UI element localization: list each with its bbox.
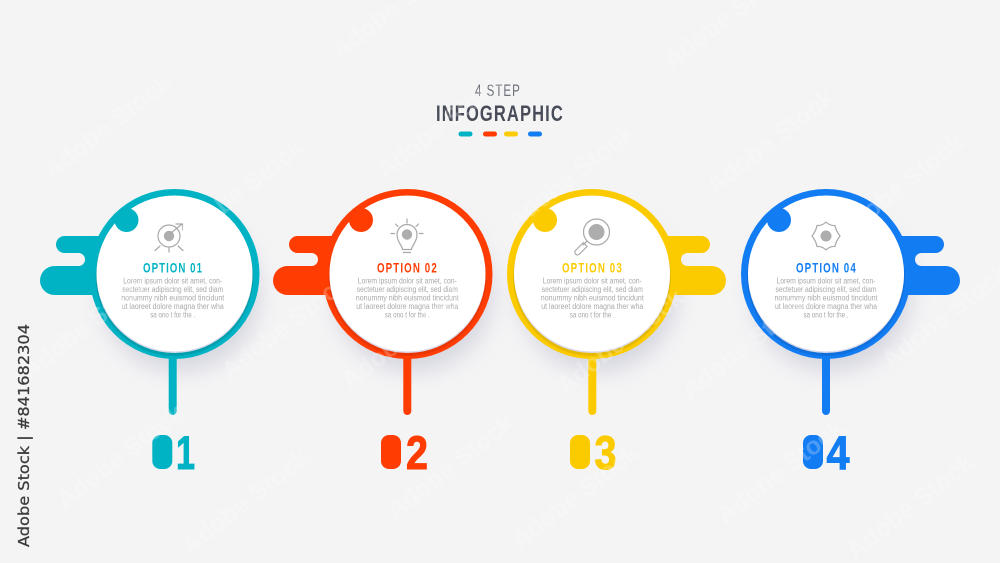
ring: [90, 189, 260, 359]
body text: sa ono t for the .: [804, 310, 848, 320]
icon: magnifying glass: [575, 219, 610, 255]
number 03: 3: [594, 426, 616, 479]
watermark pattern: Adobe Stock: [506, 439, 644, 555]
body text: sectetuer adipiscing elit, sed diam: [776, 285, 877, 294]
watermark pattern: Adobe Stock: [841, 449, 979, 563]
heading: option 02: OPTION 02: [377, 261, 437, 276]
white disc: [330, 196, 486, 352]
body text: Lorem ipsum dolor sit amet, con-: [123, 276, 222, 286]
drop shadow: [333, 212, 493, 372]
watermark pattern: Adobe Stock: [216, 269, 354, 385]
number 03: [570, 426, 616, 479]
title block: [436, 82, 563, 136]
side tabs: [886, 236, 960, 295]
body text: sectetuer adipiscing elit, sed diam: [542, 285, 643, 294]
body text: ut laoreet dolore magna ther wha: [356, 302, 459, 311]
number 02: 2: [406, 426, 428, 479]
white disc: [96, 196, 252, 352]
body text: nonummy nibh euismod tincidunt: [774, 294, 878, 302]
body text: Lorem ipsum dolor sit amet, con-: [543, 276, 642, 286]
watermark pattern: Adobe Stock: [38, 69, 176, 185]
icon: light bulb: [391, 219, 423, 252]
panel: option 03: [507, 189, 726, 479]
panel: option 04: [741, 189, 960, 479]
title: INFOGRAPHIC: INFOGRAPHIC: [436, 102, 563, 127]
body text: [541, 276, 644, 320]
body text: ut laoreet dolore magna ther wha: [541, 302, 644, 311]
drop shadow: [100, 212, 260, 372]
body text: [356, 276, 459, 320]
number 04: [803, 426, 850, 479]
body text: [774, 276, 878, 320]
number 02: [381, 426, 428, 479]
watermark pattern: Adobe Stock: [16, 269, 154, 385]
ring: [322, 189, 492, 359]
icon: gear badge: [812, 222, 840, 250]
drop shadow: [752, 212, 912, 372]
icon: target with arrow: [155, 224, 183, 252]
side tabs: [40, 236, 114, 295]
body text: nonummy nibh euismod tincidunt: [541, 294, 644, 302]
side tabs: [273, 236, 347, 295]
number 04: 4: [826, 426, 850, 479]
watermark pattern: Adobe Stock: [381, 409, 519, 525]
watermark pattern: Adobe Stock: [501, 119, 639, 235]
stem: [169, 350, 177, 415]
body text: sectetuer adipiscing elit, sed diam: [122, 285, 223, 294]
corner dot: [349, 208, 373, 232]
watermark pattern: Adobe Stock: [171, 134, 309, 250]
heading: option 01: OPTION 01: [143, 261, 202, 276]
ring: [741, 189, 911, 359]
watermark pattern: Adobe Stock: [831, 129, 969, 245]
corner dot: [533, 208, 557, 232]
white disc: [514, 196, 670, 352]
stem: [822, 350, 830, 415]
body text: sa ono t for the .: [570, 310, 615, 320]
watermark pattern: Adobe Stock: [701, 84, 839, 200]
white disc: [748, 196, 904, 352]
colour dashes: [458, 132, 542, 136]
watermark pattern: Adobe Stock: [711, 414, 849, 530]
subtitle: 4 STEP: 4 STEP: [475, 82, 520, 101]
watermark pattern: Adobe Stock: [371, 69, 509, 185]
heading: option 03: OPTION 03: [562, 261, 622, 276]
body text: ut laoreet dolore magna ther wha: [775, 302, 877, 311]
stem: [403, 350, 411, 415]
body text: sa ono t for the .: [150, 310, 195, 320]
body text: sectetuer adipiscing elit, sed diam: [357, 285, 458, 294]
body text: sa ono t for the .: [385, 310, 430, 320]
body text: [121, 276, 225, 320]
stem: [588, 350, 596, 415]
drop shadow: [518, 212, 678, 372]
body text: nonummy nibh euismod tincidunt: [121, 294, 225, 302]
watermark pattern: Adobe Stock: [336, 279, 474, 395]
heading: option 04: OPTION 04: [796, 261, 856, 276]
corner dot: [767, 208, 791, 232]
stock id side label: Adobe Stock | #841682304: [15, 324, 33, 547]
corner dot: [114, 208, 138, 232]
panel: option 02: [273, 189, 493, 479]
body text: nonummy nibh euismod tincidunt: [356, 294, 459, 302]
number 01: 1: [176, 426, 195, 479]
ring: [507, 189, 677, 359]
panel: option 01: [40, 189, 260, 479]
side tabs: [652, 236, 726, 295]
number 01: [152, 426, 195, 479]
watermark pattern: Adobe Stock: [176, 444, 314, 560]
body text: Lorem ipsum dolor sit amet, con-: [358, 276, 457, 286]
watermark pattern: Adobe Stock: [551, 284, 689, 400]
body text: ut laoreet dolore magna ther wha: [122, 302, 224, 311]
watermark pattern: Adobe Stock: [51, 399, 189, 515]
watermark pattern: Adobe Stock: [676, 289, 814, 405]
body text: Lorem ipsum dolor sit amet, con-: [776, 276, 876, 286]
